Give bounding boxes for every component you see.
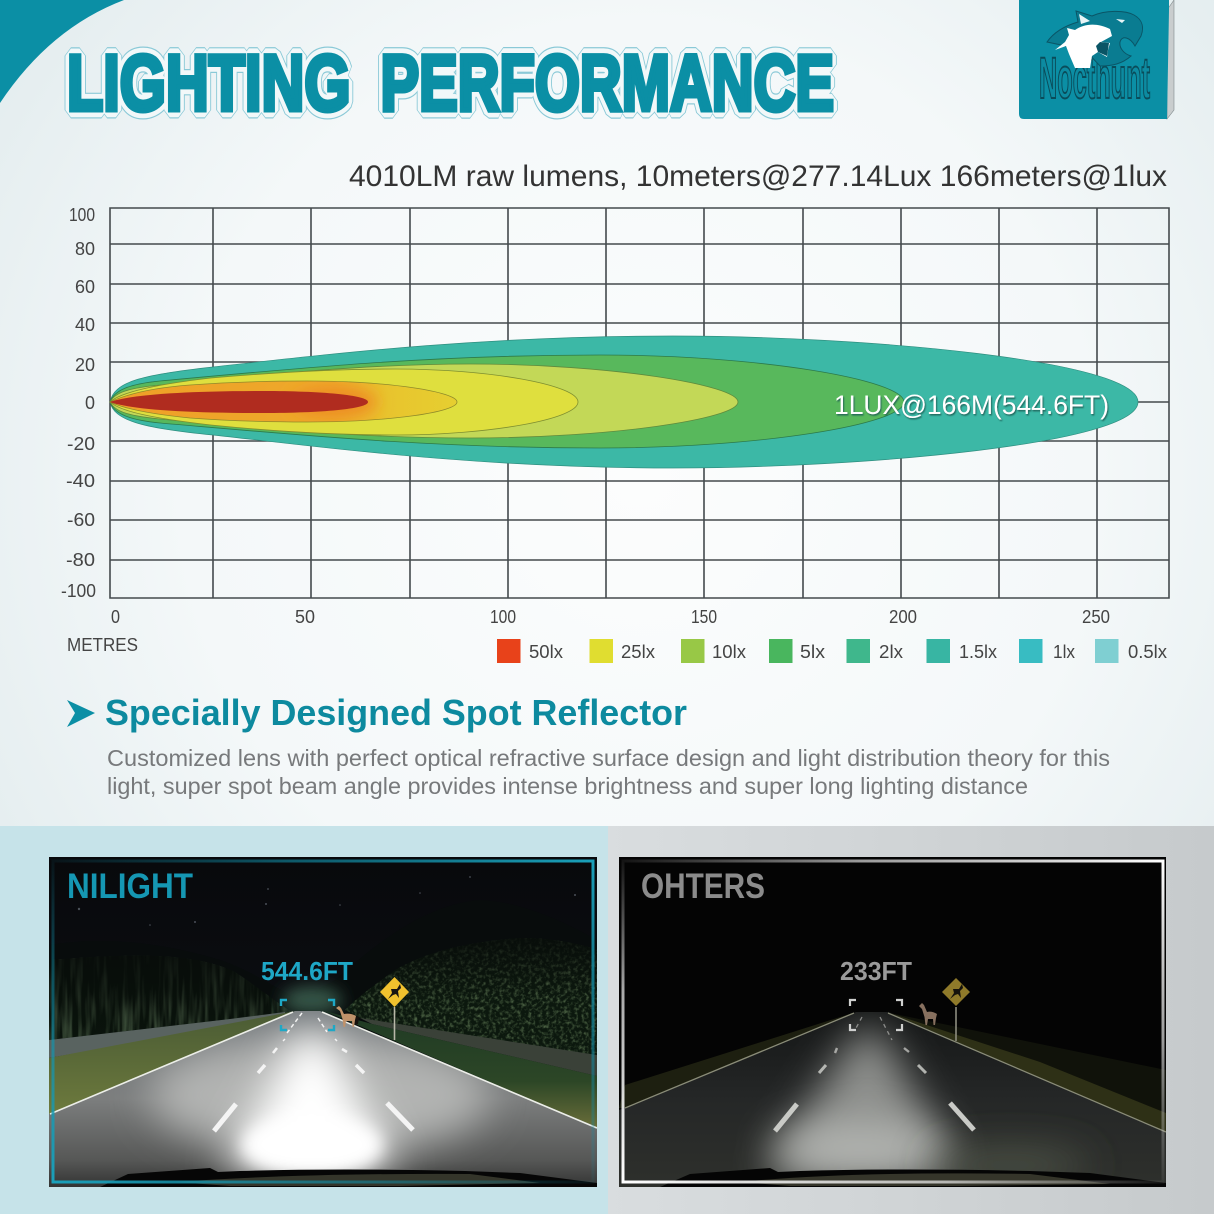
y axis labels: 60 [75, 276, 95, 297]
white frame [623, 861, 1163, 1182]
x axis unit: METRES [67, 634, 138, 655]
section heading: Specially Designed Spot Reflector [105, 692, 687, 733]
left guardrail [49, 1012, 285, 1058]
legend: 1lx [1019, 639, 1076, 663]
y axis labels: -60 [67, 509, 95, 530]
hood highlight [175, 1174, 540, 1186]
teal corner swoosh [0, 0, 124, 103]
x axis labels: 50 [295, 606, 315, 627]
distant hills [49, 900, 597, 1050]
beam: 1 lux contour [110, 336, 1138, 468]
right foliage texture [345, 938, 597, 1054]
lane dashes [214, 1013, 413, 1131]
y axis labels: 40 [75, 314, 95, 335]
legend: 0.5lx [1095, 639, 1168, 663]
chart grid [110, 208, 1169, 598]
y axis labels: 100 [69, 204, 95, 225]
dark sky [619, 857, 1166, 1110]
panel: comparison left background [0, 826, 608, 1214]
road surface [619, 1012, 1166, 1187]
x axis labels: 150 [691, 606, 717, 627]
page background [0, 0, 1214, 826]
y axis labels: 80 [75, 238, 95, 259]
title outline: inner: PERFORMANCE [380, 38, 834, 127]
x axis labels: 250 [1082, 606, 1110, 627]
headlight glow [765, 1030, 1090, 1181]
left tree line [49, 956, 292, 1040]
right verge [894, 1014, 1166, 1113]
beam callout: 1LUX@166M(544.6FT) [834, 390, 1109, 420]
legend: 5lx [769, 639, 826, 663]
y axis labels: -40 [66, 470, 95, 491]
legend: 50lx [497, 639, 564, 663]
road sign [942, 978, 970, 1041]
hood highlight [740, 1173, 1110, 1186]
distance marker brackets [850, 1000, 902, 1030]
x axis labels: 200 [889, 606, 917, 627]
lion: back head [1047, 11, 1143, 66]
title fill: PERFORMANCE [380, 38, 834, 127]
beam: hot-spot glow [293, 388, 377, 416]
night sky [49, 857, 597, 1094]
brand label: NILIGHT [67, 867, 193, 906]
right guardrail [360, 1018, 597, 1076]
legend: 25lx: 25lx [621, 641, 656, 662]
title outline: outer: PERFORMANCE [380, 38, 834, 127]
road edge lines [50, 1012, 597, 1128]
beam: 5 lux contour [110, 355, 904, 448]
legend: 2lx [846, 639, 904, 663]
road edge lines [625, 1013, 1166, 1132]
road-end haze [282, 986, 342, 1014]
distance marker brackets [281, 1000, 334, 1030]
photo: NILIGHT road scene [49, 857, 600, 1187]
deer [336, 1006, 359, 1027]
left foliage texture [49, 956, 290, 1040]
panel: comparison right background [608, 826, 1214, 1214]
beam chart [61, 204, 1169, 655]
title outline: outer: LIGHTING [67, 38, 350, 127]
deer [919, 1003, 937, 1025]
title outline: outer [67, 38, 834, 127]
road sign [380, 977, 409, 1040]
y axis labels: -80 [66, 549, 95, 570]
y axis labels [61, 204, 96, 601]
logo badge [1019, 0, 1174, 119]
teal frame [53, 861, 593, 1182]
left verge [619, 1012, 856, 1108]
beam: 50 lux core [110, 391, 368, 413]
y axis labels: 20 [75, 354, 95, 375]
title fill [67, 38, 834, 127]
badge side strip [1167, 0, 1174, 119]
icon: section arrow [67, 700, 95, 727]
car hood [100, 1168, 597, 1187]
left verge [49, 1011, 295, 1114]
brand label: OHTERS [641, 867, 765, 906]
legend: 5lx: 5lx [800, 641, 826, 662]
right tree line [346, 977, 597, 1055]
road surface [49, 1011, 597, 1187]
legend: 10lx: 10lx [712, 641, 747, 662]
section body text [107, 745, 1110, 799]
badge face [1019, 0, 1169, 119]
beam: 10 lux contour [110, 364, 738, 438]
headlight glow [150, 1035, 490, 1175]
lane dashes [775, 1017, 974, 1131]
legend: 10lx [681, 639, 747, 663]
y axis labels: -100 [61, 580, 96, 601]
title [67, 38, 834, 127]
section body text: light, super spot beam angle provides intense brightness and super long lighting distance [107, 773, 1028, 799]
right verge lit edge [890, 1013, 1166, 1132]
title outline: inner: LIGHTING [67, 38, 350, 127]
distance label: 544.6FT [261, 956, 353, 986]
beam: 25 lux contour [110, 369, 578, 435]
lion: white head [1055, 25, 1112, 68]
x axis labels [111, 606, 1110, 627]
legend [497, 639, 1168, 663]
legend: 0.5lx: 0.5lx [1128, 641, 1168, 662]
distance label: 233FT [840, 956, 912, 986]
legend: 25lx [590, 639, 656, 663]
right verge [325, 1011, 597, 1128]
car hood [660, 1168, 1166, 1187]
beam: 35 lux contour [110, 381, 457, 422]
lion: mouth [1096, 42, 1109, 56]
legend: 50lx: 50lx [529, 641, 564, 662]
legend: 1lx: 1lx [1053, 641, 1076, 662]
x axis labels: 0 [111, 606, 120, 627]
y axis labels: 0 [85, 392, 95, 413]
lion: back head highlights [1079, 14, 1125, 24]
section body text: Customized lens with perfect optical refractive surface design and light distribution theory for this [107, 745, 1110, 771]
stars [78, 876, 576, 926]
y axis labels: -20 [67, 433, 95, 454]
legend: 2lx: 2lx [879, 641, 904, 662]
legend: 1.5lx: 1.5lx [959, 641, 998, 662]
subtitle: 4010LM raw lumens, 10meters@277.14Lux 166meters@1lux [349, 160, 1167, 193]
legend: 1.5lx [926, 639, 998, 663]
title fill: LIGHTING [67, 38, 350, 127]
title outline: inner [67, 38, 834, 127]
photo: OHTERS road scene [619, 857, 1166, 1187]
x axis labels: 100 [490, 606, 516, 627]
